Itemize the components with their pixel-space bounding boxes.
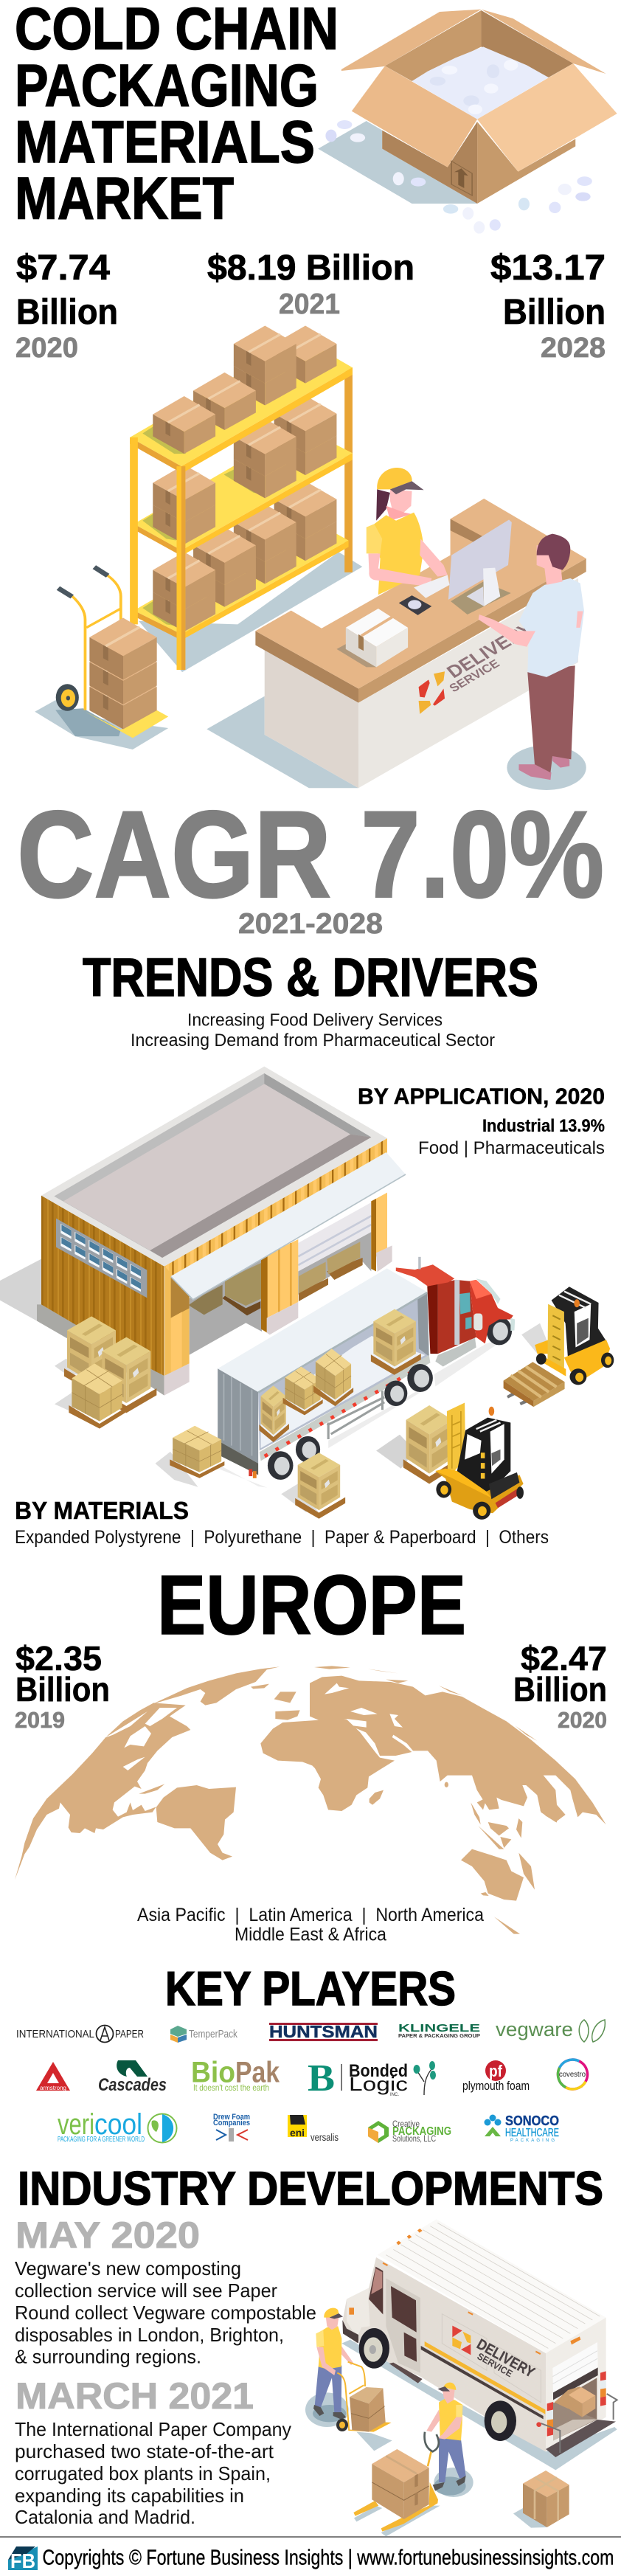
- stat: 2021 market size: 2021: [279, 288, 340, 320]
- world map: [15, 1666, 606, 1934]
- warehouse window: [56, 1219, 147, 1298]
- stat: Europe 2019: [15, 1639, 110, 1733]
- illustration: open cardboard box with packing foam: [318, 10, 617, 234]
- cargo on trailer: [260, 1309, 421, 1442]
- footer logo: FB: [10, 2549, 35, 2572]
- service counter: [255, 499, 586, 788]
- stat: Europe 2019: 2019: [15, 1707, 65, 1733]
- worker with hand truck: [305, 2308, 392, 2451]
- CAGR figure: 2021-2028: [238, 908, 383, 940]
- logo: Plymouth Foam: plymouth foam: [462, 2079, 530, 2093]
- stat: Europe 2019: $2.35: [15, 1639, 102, 1677]
- stat: 2028 market size: $13.17: [490, 249, 606, 288]
- van: [342, 2219, 617, 2457]
- trends and drivers: Increasing Food Delivery Services: [187, 1011, 443, 1031]
- stat: Europe 2020: 2020: [558, 1707, 607, 1733]
- computer, keyboard, mouse, parcel: [336, 519, 512, 667]
- logo: Sonoco Healthcare Packaging: [484, 2113, 559, 2143]
- logo: Bonded Logic: Logic: [349, 2073, 408, 2095]
- yellow shelf unit with boxes: [130, 326, 353, 670]
- forklift, upper right: [504, 1287, 614, 1407]
- logo: International Paper: [16, 2026, 144, 2042]
- development: May 2020: Vegware's new composting: [15, 2257, 241, 2279]
- stat: 2021 market size: [207, 249, 414, 320]
- van lettering: DELIVERY: [474, 2336, 538, 2381]
- logo: Drew Foam Companies: Drew Foam: [213, 2113, 250, 2122]
- title: MARKET: [15, 166, 234, 232]
- service counter: DELIVERY: [443, 619, 537, 682]
- logo: Eni Versalis: versalis: [310, 2131, 339, 2143]
- region heading: EUROPE: [157, 1559, 466, 1652]
- semi truck: [218, 1257, 515, 1480]
- logo: BioPak: [191, 2057, 280, 2093]
- by application: [358, 1084, 605, 1158]
- logo: Cascades: Cascades: [98, 2075, 167, 2095]
- logo: Klingele: KLINGELE: [398, 2022, 480, 2035]
- logo: Bonded Logic: [308, 2057, 436, 2099]
- hand truck with three boxes: [55, 567, 168, 738]
- illustration: delivery service counter and shelves: [35, 326, 586, 790]
- other regions: Asia Pacific | Latin America | North America: [137, 1905, 484, 1925]
- by application: BY APPLICATION, 2020: [358, 1084, 605, 1109]
- development: March 2021: purchased two state-of-the-art: [15, 2440, 274, 2462]
- customer: [479, 534, 584, 780]
- illustration: delivery van and workers: [305, 2219, 617, 2536]
- stat: 2028 market size: 2028: [541, 333, 606, 364]
- logo: Creative Packaging Solutions: PACKAGING: [392, 2125, 451, 2138]
- by materials: Expanded Polystyrene | Polyurethane | Paper & Paperboard | Others: [15, 1527, 549, 1548]
- logo: BioPak: It doesn't cost the earth: [193, 2082, 269, 2093]
- stat: 2021 market size: $8.19 Billion: [207, 249, 414, 288]
- logo: TemperPack: TemperPack: [189, 2028, 237, 2040]
- logo: Creative Packaging Solutions: Solutions, LLC: [392, 2133, 436, 2144]
- van lettering: SERVICE: [476, 2350, 515, 2380]
- logo: Eni Versalis: eni: [290, 2127, 305, 2139]
- stat: Europe 2020: [513, 1639, 607, 1733]
- logo: Eni Versalis: [288, 2115, 339, 2143]
- logo: Vericool: veri: [58, 2108, 94, 2141]
- crate beside trailer: [218, 1453, 345, 1519]
- map: Americas and Greenland: [15, 1666, 319, 1880]
- logo: Vegware: [496, 2018, 605, 2042]
- stat: 2028 market size: [490, 249, 606, 364]
- loading dock floor and door: [190, 1202, 371, 1355]
- development: May 2020: MAY 2020: [15, 2215, 200, 2256]
- logo: Sonoco Healthcare Packaging: HEALTHCARE: [505, 2127, 559, 2139]
- trends and drivers: [83, 948, 538, 1050]
- logo: Creative Packaging Solutions: [368, 2119, 451, 2144]
- stat: Europe 2020: $2.47: [521, 1639, 607, 1677]
- logo: BioPak: Pak: [235, 2057, 280, 2089]
- loose box: [513, 2471, 569, 2528]
- development: May 2020: & surrounding regions.: [15, 2346, 201, 2368]
- development: March 2021: corrugated box plants in Spain,: [15, 2462, 271, 2485]
- logo: Armstrong: [36, 2062, 70, 2091]
- footer rule: [0, 2536, 621, 2538]
- illustration: warehouse building: [0, 1067, 406, 1429]
- other regions: Middle East & Africa: [235, 1924, 386, 1945]
- development: May 2020: [15, 2215, 316, 2368]
- stat: 2020 market size: 2020: [15, 333, 78, 364]
- forklift with crate, lower right: [376, 1403, 524, 1520]
- by application: Industrial 13.9%: [482, 1116, 605, 1136]
- logo: Bonded Logic: Bonded: [349, 2061, 408, 2081]
- logo: Sonoco Healthcare Packaging: SONOCO: [505, 2113, 559, 2128]
- stat: 2020 market size: Billion: [16, 293, 118, 332]
- by materials: BY MATERIALS: [15, 1497, 189, 1524]
- logo: Huntsman: HUNTSMAN: [269, 2022, 378, 2041]
- by application: Food | Pharmaceuticals: [418, 1138, 605, 1158]
- logo: Vericool: cool: [94, 2108, 142, 2141]
- logo: Plymouth Foam: pf: [489, 2062, 503, 2080]
- logo: Vegware: vegware: [496, 2018, 573, 2040]
- logo: International Paper: PAPER: [115, 2028, 144, 2040]
- logo: International Paper: INTERNATIONAL: [16, 2028, 94, 2040]
- logo: Bonded Logic: B: [308, 2057, 335, 2099]
- stat: Europe 2020: Billion: [513, 1670, 607, 1708]
- other regions: [137, 1905, 484, 1945]
- title: PACKAGING: [15, 52, 319, 119]
- logo: Creative Packaging Solutions: Creative: [392, 2119, 420, 2129]
- development: May 2020: Round collect Vegware compostable: [15, 2302, 316, 2324]
- service counter: SERVICE: [446, 657, 502, 695]
- logo: Vericool: PACKAGING FOR A GREENER WORLD: [58, 2136, 145, 2144]
- development: March 2021: expanding its capabilities in: [15, 2485, 244, 2507]
- logo: Bonded Logic: INC.: [390, 2093, 399, 2097]
- logo: BioPak: Bio: [191, 2057, 235, 2089]
- logo: Vericool: [58, 2108, 177, 2144]
- logo: Covestro: [552, 2054, 593, 2094]
- development: March 2021: [15, 2375, 291, 2528]
- logo: Plymouth Foam: [462, 2060, 530, 2093]
- floor shadows: [35, 552, 586, 790]
- logo: Armstrong: armstrong: [40, 2085, 66, 2091]
- stat: Europe 2019: Billion: [15, 1670, 110, 1708]
- title: MATERIALS: [15, 109, 315, 176]
- development: March 2021: Catalonia and Madrid.: [15, 2506, 195, 2528]
- worker at computer: [367, 468, 448, 595]
- development: May 2020: disposables in London, Brighton,: [15, 2324, 284, 2346]
- logo: Covestro: covestro: [559, 2071, 586, 2079]
- stat: 2020 market size: [15, 249, 118, 364]
- map: Eurasia, Africa and Oceania: [310, 1666, 606, 1934]
- trends and drivers: Increasing Demand from Pharmaceutical Sector: [131, 1031, 495, 1050]
- logo: Sonoco Healthcare Packaging: PACKAGING: [510, 2139, 555, 2143]
- by materials: [15, 1497, 549, 1548]
- logo: Cascades: [98, 2060, 167, 2095]
- title: [15, 0, 339, 232]
- logo: Drew Foam Companies: Companies: [213, 2119, 250, 2127]
- development: March 2021: The International Paper Company: [15, 2418, 291, 2440]
- worker with pallet truck: [353, 2383, 473, 2536]
- trends and drivers: TRENDS & DRIVERS: [83, 948, 538, 1008]
- development: May 2020: collection service will see Paper: [15, 2279, 277, 2302]
- stat: 2020 market size: $7.74: [16, 249, 110, 288]
- stacked crates beside warehouse: [55, 1316, 156, 1429]
- logo: Klingele: [398, 2022, 480, 2039]
- truck cab: [396, 1257, 515, 1366]
- key players heading: KEY PLAYERS: [165, 1962, 456, 2015]
- crate stack beside trailer left: [156, 1426, 224, 1487]
- development: March 2021: MARCH 2021: [15, 2375, 254, 2417]
- wall columns and bases: [164, 1152, 406, 1396]
- logo: TemperPack: [170, 2026, 237, 2043]
- stat: 2028 market size: Billion: [503, 293, 606, 332]
- logo: Klingele: PAPER & PACKAGING GROUP: [398, 2034, 480, 2039]
- logo: Drew Foam Companies: [213, 2113, 250, 2142]
